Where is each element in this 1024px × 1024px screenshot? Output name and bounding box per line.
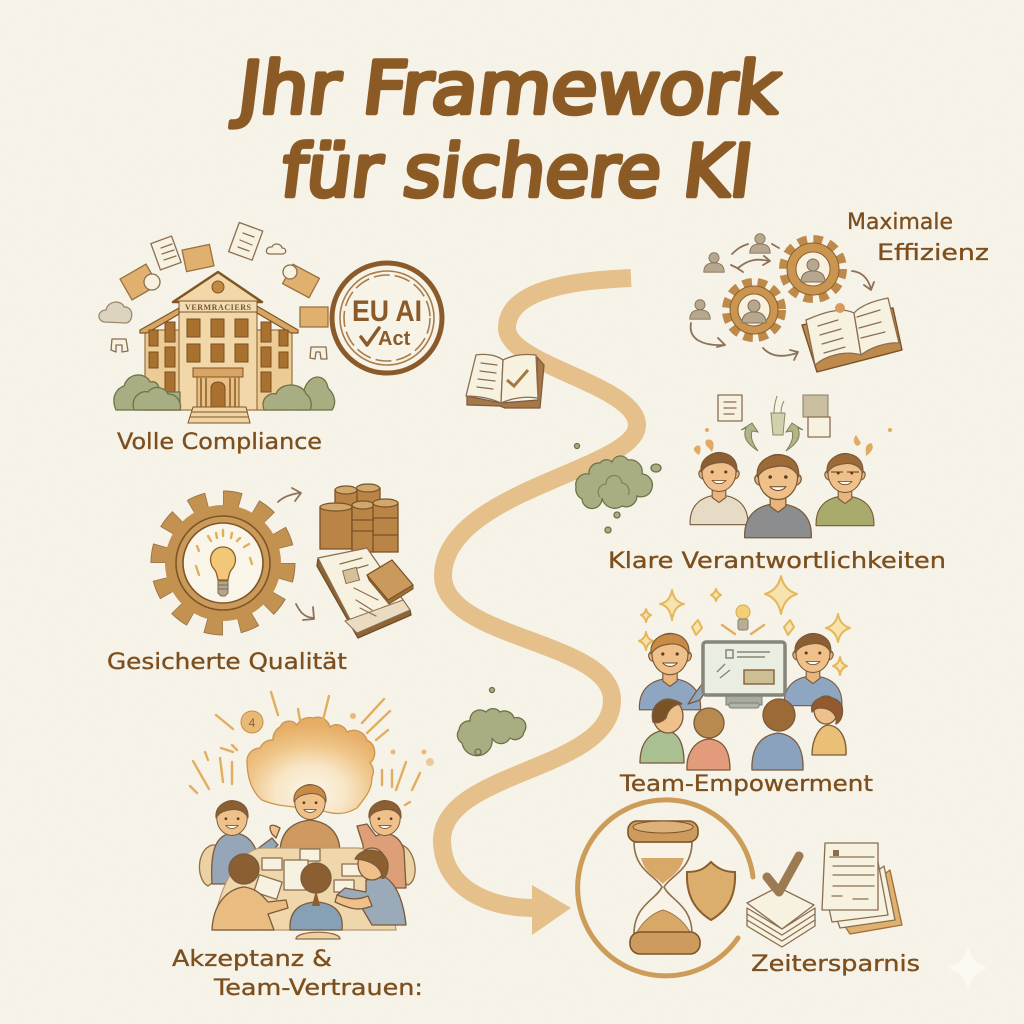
label: Akzeptanz und Team-Vertrauen: Akzeptanz & — [172, 947, 332, 972]
icon: hourglass — [628, 821, 700, 954]
icon: upper gear — [784, 240, 842, 298]
icon: sparkles and bulb — [639, 576, 850, 675]
icon: floating documents and messages — [99, 223, 328, 359]
title: Jhr Framework — [230, 47, 785, 131]
icon: stacked documents — [317, 548, 413, 638]
icon: open book — [802, 298, 902, 372]
label: Akzeptanz und Team-Vertrauen — [172, 947, 423, 1001]
panel: Akzeptanz und Team-Vertrauen — [172, 692, 434, 1001]
icon: chairs — [199, 845, 415, 939]
icon: open book on path — [466, 354, 544, 408]
icon: bushes — [114, 375, 335, 410]
icon: EU AI Act stamp — [332, 263, 442, 373]
icon: presenters — [639, 633, 842, 710]
label: Volle Compliance: Volle Compliance — [117, 430, 322, 455]
icon: corner sparkle — [948, 946, 988, 990]
icon: documents — [822, 843, 902, 934]
icon: circular arc — [578, 800, 753, 976]
label: Gesicherte Qualität: Gesicherte Qualität — [107, 650, 347, 675]
icon: gear with light bulb — [159, 499, 287, 627]
icon: green cloud lower — [457, 688, 526, 756]
icon: shield — [687, 862, 735, 920]
label: Maximale Effizienz — [847, 210, 989, 266]
icon: back people — [212, 785, 406, 888]
icon: green cloud upper — [574, 444, 661, 533]
panel: Gesicherte Qualität — [107, 484, 413, 675]
icon: building: VERMRACIERS — [185, 303, 252, 312]
label: Zeitersparnis: Zeitersparnis — [751, 952, 920, 977]
label: Akzeptanz und Team-Vertrauen: Team-Vertrauen: — [213, 976, 423, 1001]
label: Team-Empowerment: Team-Empowerment — [619, 772, 873, 797]
panel: Zeitersparnis — [578, 800, 920, 977]
icon: check on stack of papers — [747, 856, 815, 947]
icon: table with papers — [214, 848, 396, 930]
title: für sichere KI — [277, 130, 757, 214]
icon: stacks of coins — [320, 484, 398, 552]
icon: EU AI Act stamp: EU AI — [352, 295, 422, 328]
icon: audience — [640, 696, 846, 770]
icon: arrows — [278, 488, 314, 620]
icon: explosion cloud and rays: 4 — [249, 716, 256, 730]
icon: tasks and arrows — [694, 395, 892, 456]
panel: Volle Compliance — [99, 223, 442, 455]
label: Maximale Effizienz: Effizienz — [877, 241, 989, 266]
icon: explosion cloud and rays — [190, 692, 434, 814]
icon: monitor — [703, 642, 785, 708]
panel: Team-Empowerment — [619, 576, 873, 797]
label: Klare Verantwortlichkeiten: Klare Verantwortlichkeiten — [608, 549, 946, 574]
panel: Klare Verantwortlichkeiten — [608, 395, 946, 574]
winding path arrow — [442, 278, 637, 935]
title — [230, 47, 785, 214]
label: Maximale Effizienz: Maximale — [847, 210, 953, 235]
icon: EU AI Act stamp: Act — [378, 328, 411, 350]
icon: lower gear — [727, 283, 781, 337]
icon: building — [140, 272, 298, 423]
icon: front people — [212, 848, 406, 930]
panel: Maximale Effizienz — [690, 210, 989, 372]
icon: people and arrows — [690, 234, 874, 360]
icon: three people — [690, 452, 874, 538]
